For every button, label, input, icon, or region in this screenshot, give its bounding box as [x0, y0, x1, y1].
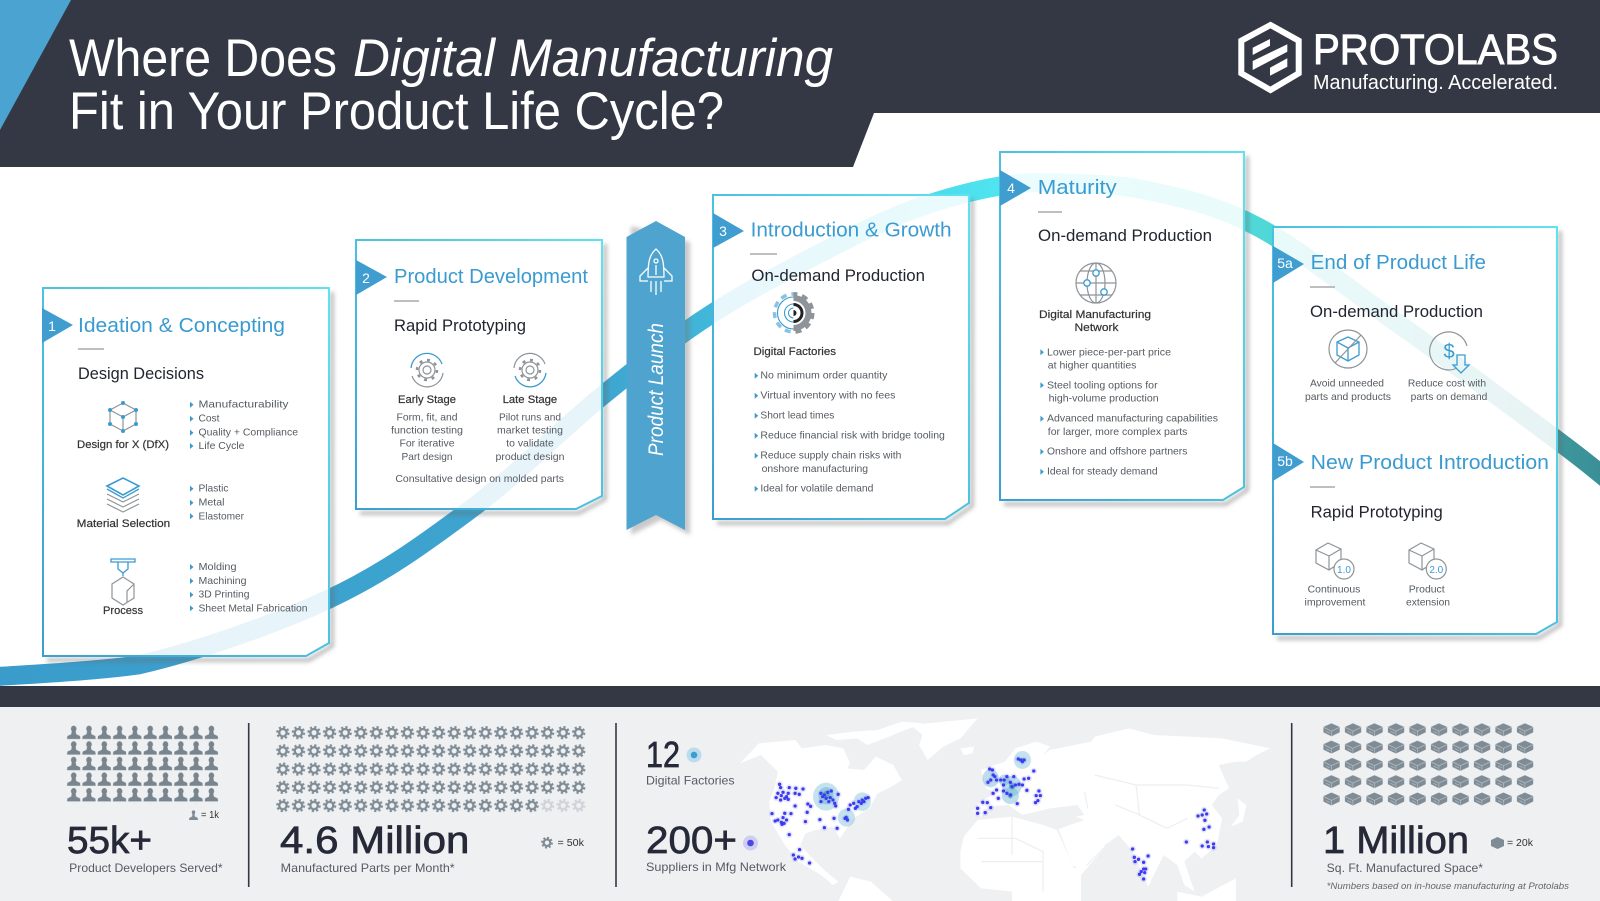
label: digital manufacturing network: Digital Manufacturing — [1039, 309, 1151, 321]
product launch ribbon — [626, 221, 690, 535]
caption: manufactured space: Sq. Ft. Manufactured Space* — [1327, 861, 1483, 875]
step tab 3: 3 — [719, 223, 727, 239]
title: Digital Manufacturing — [353, 29, 834, 88]
ribbon label: Product Launch — [645, 323, 668, 456]
title: Fit in Your Product Life Cycle? — [69, 82, 724, 141]
panel 4 heading: Maturity — [1038, 177, 1117, 199]
statistics strip background — [0, 707, 1600, 901]
text: reduce cost: Reduce cost with — [1408, 378, 1486, 390]
icon: digital factory gear — [774, 294, 812, 332]
figure: 200+: 200+ — [646, 820, 737, 862]
list: DfX topics: Quality + Compliance — [198, 427, 298, 439]
text: reduce cost — [1408, 378, 1487, 403]
figure: 12: 12 — [646, 734, 680, 775]
factory location halos — [813, 751, 1031, 827]
label: digital manufacturing network: Network — [1074, 322, 1119, 334]
list: DfX topics: Manufacturability — [198, 399, 289, 411]
late stage text: product design — [496, 451, 565, 463]
stat: manufactured space — [1323, 721, 1569, 892]
list: factory benefits: onshore manufacturing — [762, 463, 868, 475]
footnote: *Numbers based on in-house manufacturing at Protolabs — [1327, 881, 1569, 892]
text: avoid unneeded parts: Avoid unneeded — [1310, 378, 1384, 390]
logo: Protolabs — [1241, 25, 1558, 94]
panel 1 subheading: Design Decisions — [78, 365, 204, 383]
icon: continuous improvement box — [1316, 543, 1354, 579]
legend: gear equals 50k: = 50k — [558, 838, 585, 849]
icon: avoid unneeded parts — [1329, 330, 1367, 368]
legend: box equals 20k — [1491, 837, 1534, 849]
icon: early stage gear cycle — [411, 353, 443, 387]
pictogram: people grid — [66, 726, 219, 804]
legend: person equals 1k: = 1k — [201, 810, 220, 821]
list: materials — [190, 483, 244, 522]
early stage text: Form, fit, and — [396, 412, 458, 424]
late stage text — [496, 394, 565, 463]
list: factory benefits: Reduce supply chain risks with — [760, 450, 902, 462]
label: process: Process — [103, 605, 143, 617]
list: factory benefits — [755, 370, 945, 495]
list: network benefits — [1040, 346, 1218, 478]
pictogram: gears grid — [276, 724, 587, 815]
panel 5a heading: End of Product Life — [1311, 252, 1486, 274]
land masses — [740, 718, 1270, 901]
text: reduce cost: parts on demand — [1411, 391, 1487, 403]
list: network benefits: Lower piece-per-part price — [1047, 346, 1171, 358]
text: product extension — [1406, 583, 1450, 609]
text: continuous improvement: Continuous — [1308, 583, 1360, 595]
text: continuous improvement: improvement — [1304, 597, 1366, 609]
panel 4 subheading: On-demand Production — [1038, 227, 1212, 245]
note: consultative design: Consultative design on molded parts — [395, 473, 564, 485]
early stage text: For iterative — [400, 438, 455, 450]
stat: product developers — [66, 726, 223, 875]
figure: 4.6 million: 4.6 Million — [280, 820, 469, 862]
title — [69, 29, 834, 141]
life cycle curve — [0, 183, 1600, 677]
title: Where Does — [69, 29, 337, 88]
logo hexagon mark — [1241, 25, 1299, 90]
panel 5b subheading: Rapid Prototyping — [1311, 503, 1443, 521]
icon: late stage gear cycle — [514, 353, 546, 387]
panel 2 heading: Product Development — [394, 266, 588, 288]
icon: reduce cost: $ — [1443, 341, 1455, 363]
caption: suppliers: Suppliers in Mfg Network — [646, 860, 787, 874]
label: design for X: Design for X (DfX) — [77, 439, 169, 451]
list: processes: Machining — [198, 575, 247, 587]
late stage text: Late Stage — [503, 394, 557, 406]
icon: continuous improvement box: 1.0 — [1337, 565, 1351, 576]
faint sea and border lines — [978, 775, 1219, 892]
legend: box equals 20k: = 20k — [1507, 838, 1534, 849]
caption: manufactured parts: Manufactured Parts per Month* — [281, 861, 455, 875]
list: network benefits: Advanced manufacturing capabilities — [1047, 413, 1218, 425]
legend dot: supplier — [743, 836, 758, 850]
list: network benefits: at higher quantities — [1048, 359, 1136, 371]
early stage text: function testing — [391, 425, 463, 437]
label: digital factories: Digital Factories — [754, 346, 837, 358]
legend: person equals 1k — [189, 810, 220, 821]
header banner — [0, 0, 1600, 167]
step tab 2: 2 — [362, 270, 370, 286]
step tab 5b: 5b — [1277, 453, 1293, 469]
icon: material layers — [107, 478, 139, 512]
step tab 1: 1 — [48, 318, 56, 334]
list: processes — [190, 561, 308, 614]
late stage text: Pilot runs and — [499, 412, 561, 424]
icon: process nozzle and part — [111, 559, 135, 605]
logo tagline: Manufacturing. Accelerated. — [1313, 72, 1558, 94]
panel 2 subheading: Rapid Prototyping — [394, 317, 526, 335]
text: avoid unneeded parts — [1305, 378, 1391, 403]
list: processes: Molding — [198, 561, 237, 573]
list: network benefits: Steel tooling options for — [1047, 379, 1158, 391]
world map — [740, 718, 1270, 901]
icon: design for X cube — [108, 401, 138, 433]
list: processes: 3D Printing — [198, 589, 250, 601]
panel 3: Introduction & Growth — [713, 195, 972, 523]
stat: manufactured parts — [276, 724, 587, 875]
panel 5: End of Product Life and New Product Introduction — [1273, 227, 1560, 638]
list: materials: Elastomer — [198, 510, 244, 522]
panel 5a subheading: On-demand Production — [1310, 303, 1483, 321]
list: network benefits: high-volume production — [1049, 393, 1159, 405]
label: material selection: Material Selection — [77, 518, 170, 530]
step tab 4: 4 — [1007, 180, 1015, 196]
pictogram: boxes grid — [1323, 721, 1538, 808]
text: continuous improvement — [1304, 583, 1366, 609]
list: materials: Plastic — [198, 483, 228, 495]
late stage text: market testing — [497, 425, 563, 437]
label: digital manufacturing network — [1039, 309, 1151, 334]
early stage text — [391, 394, 463, 463]
legend: gear equals 50k — [542, 838, 585, 849]
caption: product developers: Product Developers Served* — [69, 861, 223, 875]
panel 3 subheading: On-demand Production — [751, 267, 925, 285]
list: materials: Metal — [198, 497, 224, 509]
panel 1: Ideation & Concepting — [42, 288, 332, 660]
stat: suppliers — [646, 820, 787, 874]
stat: digital factories — [646, 734, 734, 787]
list: factory benefits: Virtual inventory with no fees — [760, 390, 895, 402]
early stage text: Part design — [402, 451, 453, 463]
panel 1 heading: Ideation & Concepting — [78, 315, 285, 337]
list: DfX topics: Cost — [198, 413, 220, 425]
early stage text: Early Stage — [398, 394, 456, 406]
list: processes: Sheet Metal Fabrication — [198, 602, 308, 614]
blue corner accent — [0, 0, 71, 130]
caption: digital factories: Digital Factories — [646, 773, 734, 787]
text: product extension: Product — [1409, 583, 1445, 595]
step tab 5a: 5a — [1277, 255, 1293, 271]
text: avoid unneeded parts: parts and products — [1305, 391, 1391, 403]
step tab 3 — [713, 213, 744, 248]
step tab 1 — [42, 308, 73, 343]
figure: 55k+: 55k+ — [67, 820, 152, 862]
legend dot: factory — [686, 748, 702, 762]
panel 3 heading: Introduction & Growth — [751, 220, 952, 242]
text: product extension: extension — [1406, 597, 1450, 609]
list: factory benefits: Ideal for volatile demand — [760, 483, 874, 495]
list: network benefits: for larger, more complex parts — [1048, 426, 1187, 438]
icon: product extension box — [1409, 543, 1446, 579]
icon: rocket — [640, 249, 672, 295]
step tab 4 — [1000, 170, 1031, 206]
list: DfX topics: Life Cycle — [198, 440, 245, 452]
icon: reduce cost — [1430, 332, 1469, 373]
figure: 1 million: 1 Million — [1323, 820, 1469, 862]
list: DfX topics — [190, 399, 298, 452]
list: factory benefits: No minimum order quantity — [760, 370, 888, 382]
step tab 2 — [356, 260, 387, 295]
panel 4: Maturity — [1000, 152, 1247, 504]
step tab 5a — [1273, 246, 1304, 283]
panel 2: Product Development — [356, 240, 605, 513]
icon: product extension box: 2.0 — [1429, 565, 1444, 576]
list: network benefits: Ideal for steady demand — [1047, 466, 1158, 478]
supplier location dots — [772, 759, 1214, 879]
footer dark band — [0, 686, 1600, 707]
late stage text: to validate — [506, 438, 554, 450]
logo wordmark: PROTOLABS — [1313, 26, 1558, 74]
step tab 5b — [1273, 443, 1304, 481]
list: network benefits: Onshore and offshore partners — [1047, 446, 1187, 458]
icon: globe network — [1076, 263, 1116, 303]
panel 5b heading: New Product Introduction — [1311, 452, 1549, 474]
list: factory benefits: Short lead times — [760, 410, 834, 422]
list: factory benefits: Reduce financial risk with bridge tooling — [760, 430, 945, 442]
